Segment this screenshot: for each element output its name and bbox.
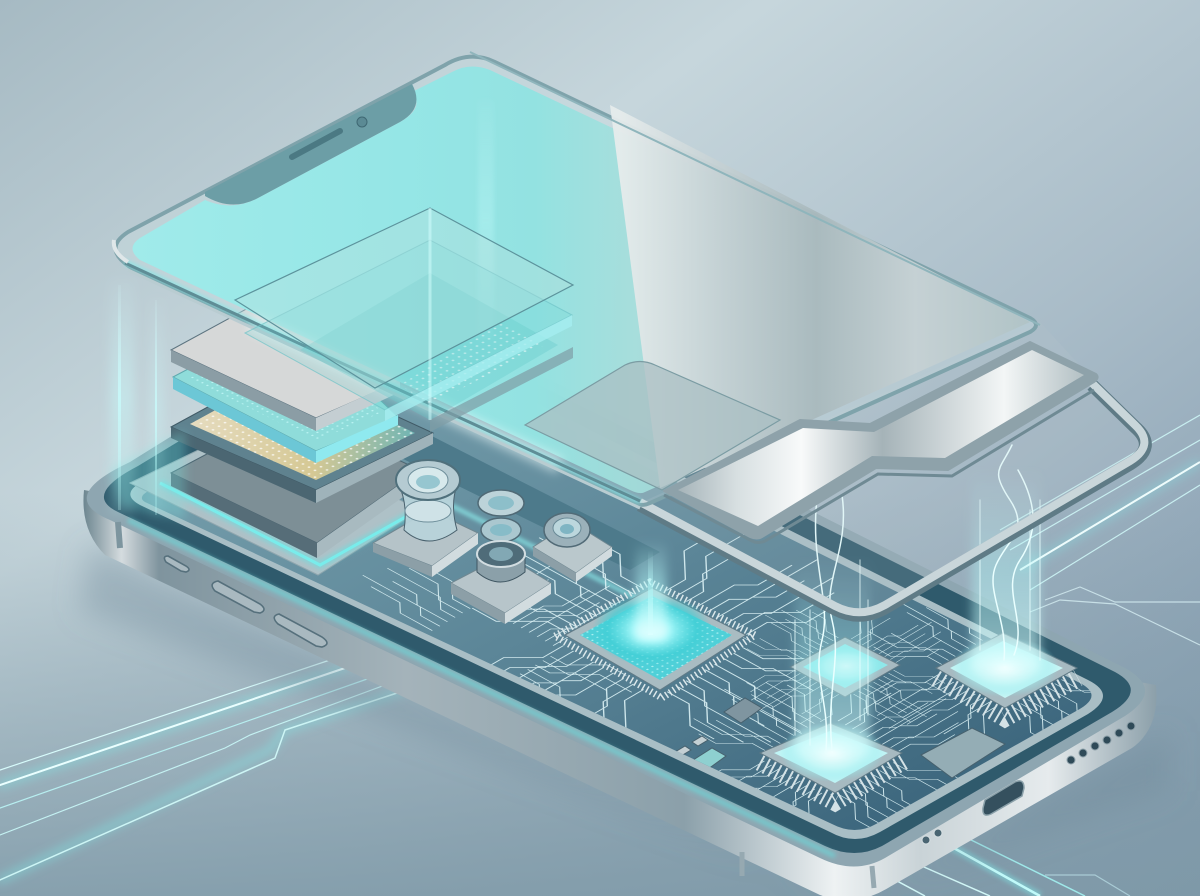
silver inner bezel xyxy=(130,332,1103,839)
rising light columns at left xyxy=(110,280,185,520)
glowing teal edge xyxy=(128,520,835,856)
screen glass surface xyxy=(132,66,1026,493)
lower glass frame xyxy=(640,322,1145,615)
camera: large lens xyxy=(373,460,478,577)
charging port xyxy=(983,781,1024,815)
antenna bands xyxy=(742,852,874,888)
speaker slot xyxy=(292,131,340,157)
front bright edge xyxy=(125,262,640,502)
reflection panel xyxy=(610,105,1030,488)
side wall xyxy=(83,490,1157,896)
chip: middle xyxy=(790,637,900,697)
white streak along front edge xyxy=(250,322,560,466)
layer: teal dotted xyxy=(173,315,398,463)
square shield panel xyxy=(525,362,780,490)
passive components xyxy=(676,698,1006,778)
floor circuit lines: lower left xyxy=(0,660,400,880)
phone base xyxy=(80,300,1170,896)
circuit traces xyxy=(362,534,1091,828)
microphone holes xyxy=(922,829,942,844)
layer: teal glass sheet xyxy=(245,240,572,421)
camera modules xyxy=(373,460,612,624)
layer: gold dotted xyxy=(171,365,433,503)
camera: stacked lens xyxy=(451,490,551,624)
side buttons xyxy=(164,556,327,647)
camera: small lens xyxy=(533,513,612,582)
notch band xyxy=(205,84,416,205)
screen outer frame xyxy=(116,57,1036,505)
speaker holes xyxy=(1067,722,1135,764)
top rim xyxy=(87,300,1145,866)
upper display sheets seen through glass xyxy=(235,208,573,432)
chip: right xyxy=(936,633,1078,718)
energy beams and lightning xyxy=(636,445,1040,755)
layer: silver sheet xyxy=(171,288,430,431)
top glass screen xyxy=(114,52,1040,508)
silver battery strip xyxy=(664,342,1098,542)
floor circuit lines: right xyxy=(1000,415,1200,645)
layer: dark base xyxy=(171,410,420,558)
layer: clear glass sheet xyxy=(235,208,573,388)
front camera dot xyxy=(357,117,367,127)
floor circuit lines: bottom xyxy=(886,835,1130,896)
darker band behind glass edge xyxy=(395,430,660,570)
glass plate under stack xyxy=(130,425,420,575)
chip: main processor xyxy=(555,582,755,698)
circuit board xyxy=(142,342,1091,830)
chip: lower xyxy=(760,722,905,802)
display stack layers xyxy=(171,288,433,558)
shadow under base xyxy=(80,545,1170,896)
layer: upper dotted sheet xyxy=(300,273,573,432)
dark band xyxy=(104,312,1131,853)
